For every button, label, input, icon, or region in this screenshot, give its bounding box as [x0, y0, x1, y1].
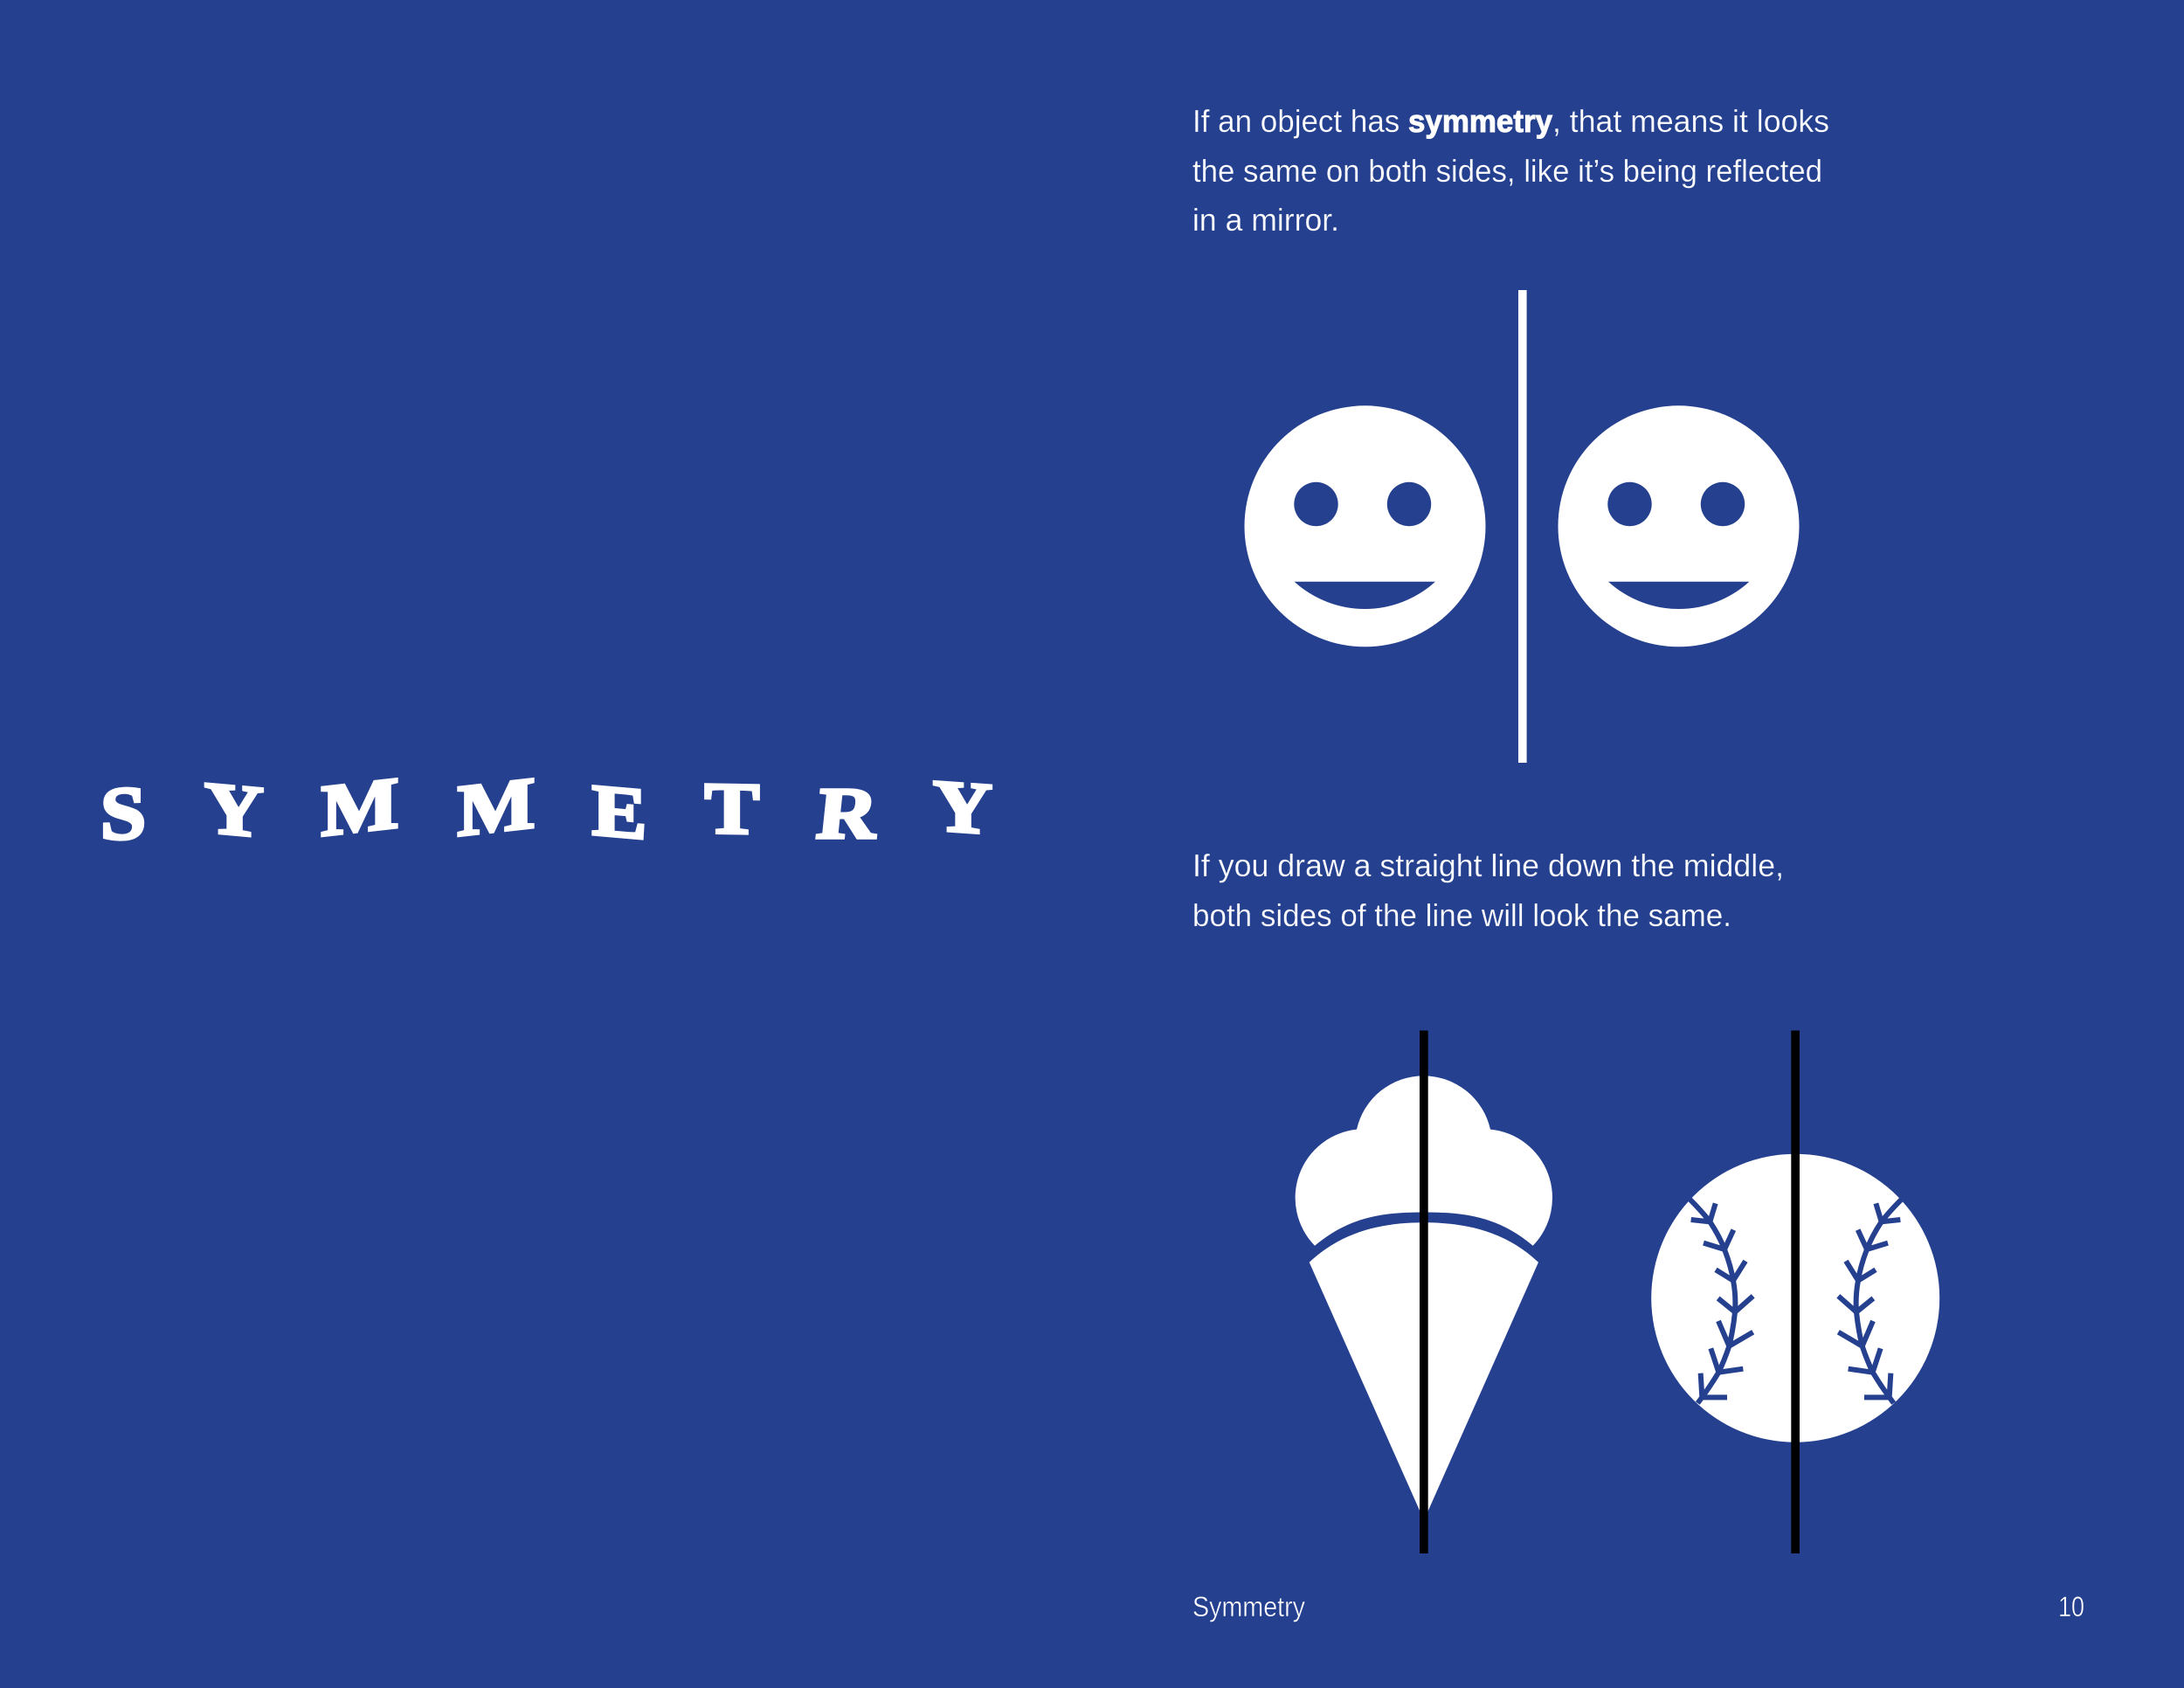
left smiley face: [1244, 405, 1485, 647]
smiley faces with mirror line: [1244, 290, 1800, 763]
text block: symmetry definition: If an object has: [1192, 103, 1408, 139]
title: SYMMETRY: E: [592, 770, 646, 855]
text block: straight line explanation: both sides of the line will look the same.: [1192, 897, 1731, 933]
text block: straight line explanation: If you draw a straight line down the middle,: [1192, 847, 1784, 883]
cone: [1310, 1222, 1538, 1520]
title: SYMMETRY: T: [705, 768, 759, 850]
title: SYMMETRY: Y: [933, 764, 992, 850]
text block: symmetry definition: symmetry: [1408, 103, 1552, 139]
left stitches: [1689, 1199, 1753, 1403]
mirror line: [1518, 290, 1527, 763]
title: SYMMETRY: M: [458, 762, 535, 852]
text block: symmetry definition: the same on both sides, like it’s being reflected: [1192, 153, 1822, 189]
ice cream scoops: [1296, 1076, 1552, 1246]
text block: symmetry definition: , that means it looks: [1552, 103, 1829, 139]
page number: 10: [2058, 1591, 2084, 1622]
right smiley face: [1559, 405, 1800, 647]
text block: symmetry definition: [1192, 103, 1829, 238]
footer label: Symmetry: [1192, 1591, 1305, 1622]
right stitches: [1838, 1199, 1903, 1403]
title: SYMMETRY: Y: [204, 767, 264, 854]
title: SYMMETRY: R: [813, 773, 882, 854]
symmetry line: [1791, 1031, 1800, 1553]
icon: baseball with symmetry line: [1651, 1031, 1939, 1553]
text block: symmetry definition: in a mirror.: [1192, 202, 1339, 238]
symmetry line: [1420, 1031, 1428, 1553]
baseball: [1651, 1154, 1939, 1442]
text block: straight line explanation: [1192, 847, 1784, 933]
title: SYMMETRY: S: [100, 770, 146, 856]
icon: ice cream cone with symmetry line: [1296, 1031, 1552, 1553]
title: SYMMETRY: M: [321, 762, 398, 852]
title: SYMMETRY: [100, 762, 992, 856]
